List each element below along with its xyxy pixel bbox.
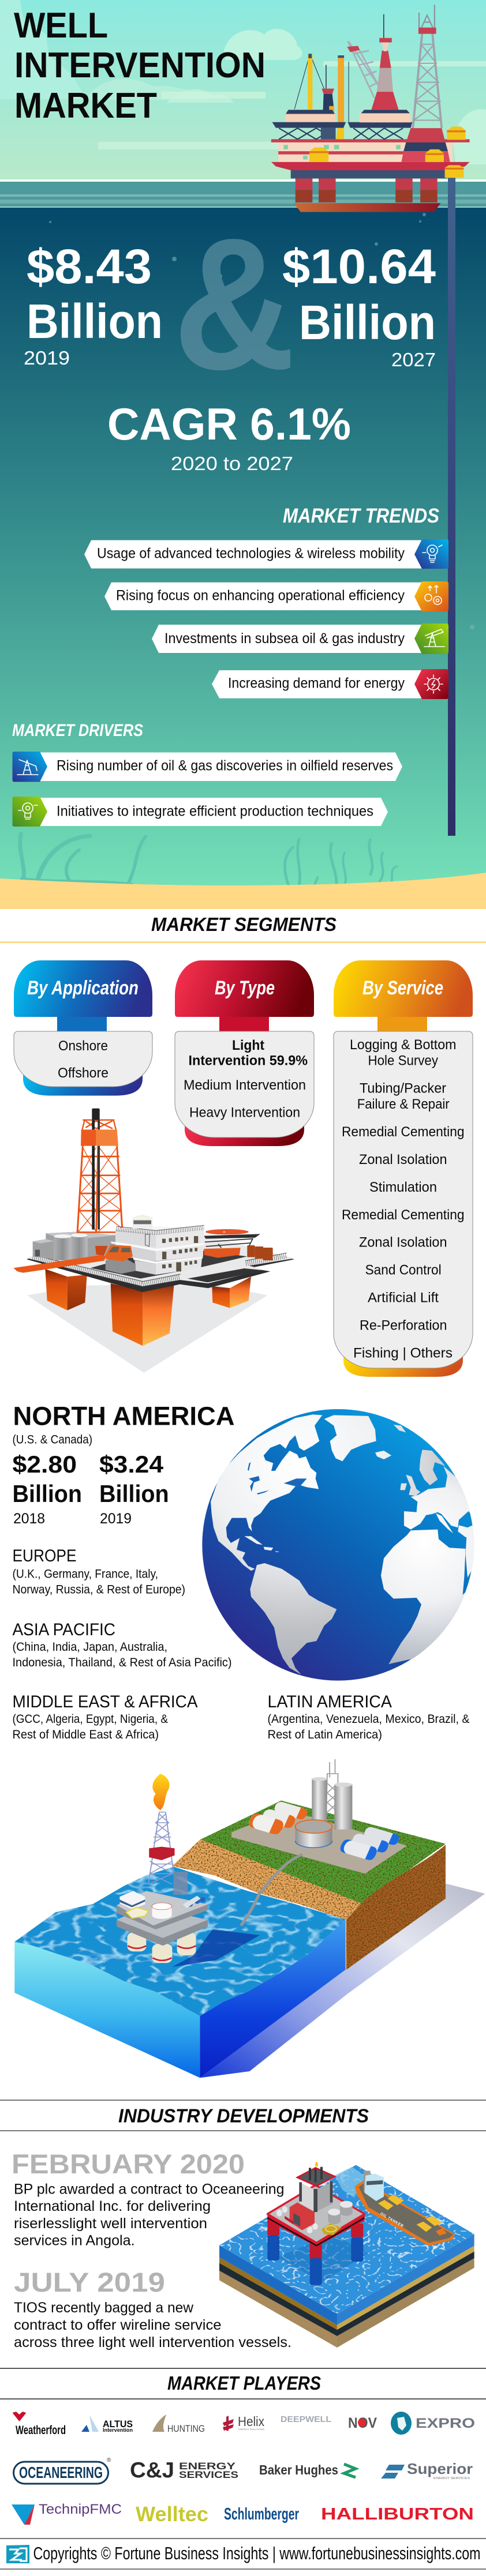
stat: 2027 market value: 2027 [391,349,436,370]
development: February 2020: BP plc awarded a contract to Oceaneering [14,2181,284,2197]
panel: by service: Artificial Lift [368,1290,439,1306]
logo: Altus Intervention: ALTUS [103,2419,133,2429]
region: North America: 2018 [13,1511,45,1527]
region: North America: NORTH AMERICA [13,1402,234,1430]
logo: C&J Energy Services [130,2458,238,2483]
development: February 2020: services in Angola. [14,2233,135,2249]
region: Europe [13,1546,185,1597]
panel: market drivers list [13,752,402,827]
panel: market trends list [84,539,448,699]
panel: by service: Logging & Bottom [350,1037,456,1053]
region: Latin America: LATIN AMERICA [268,1692,392,1711]
trend: subsea investments [152,624,448,654]
title: INTERVENTION [14,46,266,85]
section heading: industry developments: INDUSTRY DEVELOPMENTS [118,2105,369,2126]
driver: discoveries: Rising number of oil & gas discoveries in oilfield reserves [57,758,393,774]
region: Europe: Norway, Russia, & Rest of Europe) [13,1583,185,1597]
development: July 2019 [14,2267,291,2350]
region: Middle East and Africa: MIDDLE EAST & AFRICA [13,1692,197,1711]
logo: Helix: Helix [238,2414,264,2429]
panel: by service: Remedial Cementing [342,1207,464,1223]
stat: 2019 market value [24,239,163,369]
stat: CAGR: 2020 to 2027 [171,453,293,474]
logo: NOV: NOV [348,2415,377,2431]
trend: operational efficiency: Rising focus on enhancing operational efficiency [116,588,405,604]
land, refinery and platform [117,1759,446,1970]
development: February 2020 [12,2149,284,2249]
logo: Superior: Superior [407,2460,473,2477]
panel: ocean hero background [0,0,486,909]
illustration: offshore to onshore isometric scene [14,1759,485,2078]
title: MARKET [14,86,157,126]
panel: by application: By Application [27,977,139,999]
region: Asia Pacific: (China, India, Japan, Australia, [13,1640,167,1654]
region: North America: Billion [13,1480,82,1507]
logo: Welltec: Welltec [136,2502,208,2526]
region: Europe: (U.K., Germany, France, Italy, [13,1568,158,1581]
illustration: offshore platform [13,1109,294,1373]
logo: TechnipFMC: TechnipFMC [39,2502,122,2517]
illustration: offshore platform: H [223,1231,226,1234]
panel: by service: Zonal Isolation [359,1152,447,1167]
region: Middle East and Africa: (GCC, Algeria, Egypt, Nigeria, & [13,1713,168,1726]
heading: market drivers: MARKET DRIVERS [12,721,143,740]
logo: Hunting [152,2414,205,2434]
panel: by application: Offshore [58,1065,109,1081]
panel: company logos [12,2412,475,2526]
panel: by type [175,960,314,1146]
panel: by service: Stimulation [369,1180,437,1195]
region: Europe: EUROPE [13,1546,76,1565]
panel: regional breakdown [13,1402,470,1741]
illustration: isometric rig and tanker: OIL TANKER [379,2212,404,2228]
region: Latin America: Rest of Latin America) [268,1728,382,1741]
development: July 2019: TIOS recently bagged a new [14,2300,194,2316]
panel: by service: Zonal Isolation [359,1235,447,1251]
panel: by type: Intervention 59.9% [188,1053,308,1068]
region: North America [13,1402,234,1527]
logo: TechnipFMC [12,2502,122,2525]
icon: Fortune Business Insights logo [6,2545,29,2563]
section heading: market players: MARKET PLAYERS [167,2372,321,2394]
pipe [448,167,455,836]
stat: 2027 market value: Billion [299,295,436,350]
trend: advanced technologies [84,539,448,569]
title [14,6,266,126]
development: February 2020: riserlesslight well intervention [14,2215,207,2232]
trend: operational efficiency [104,581,448,611]
logo: C&J Energy Services: C&J [130,2458,174,2483]
illustration: seaweed [20,833,397,885]
logo: Baker Hughes: Baker Hughes [259,2462,338,2477]
panel: by service: Hole Survey [368,1053,438,1068]
panel: by service: Failure & Repair [357,1097,450,1112]
logo: Helix: ENERGY SOLUTIONS [238,2428,264,2431]
sand seabed [0,873,486,909]
logo: Altus Intervention [81,2415,133,2433]
development: July 2019: across three light well intervention vessels. [14,2334,291,2350]
panel: by application: Onshore [58,1038,108,1054]
development: February 2020: International Inc. for delivering [14,2198,211,2214]
region: North America: 2019 [100,1511,132,1527]
panel: by service: Sand Control [365,1263,442,1278]
logo: Expro [391,2412,475,2435]
region: Latin America [268,1692,470,1741]
driver: efficient production [13,797,388,827]
logo: Deepwell: DEEPWELL [281,2414,331,2424]
logo: Weatherford: Weatherford [16,2424,66,2437]
driver: discoveries [13,752,402,782]
stat: 2027 market value: $10.64 [282,239,436,294]
footer [0,2538,486,2570]
illustration: isometric rig and tanker [219,2161,474,2348]
trend: energy demand [212,669,448,699]
heading: market trends: MARKET TRENDS [283,505,439,527]
panel: by service: Remedial Cementing [342,1124,464,1140]
region: North America: $2.80 [13,1451,77,1478]
logo: C&J Energy Services: SERVICES [179,2469,238,2480]
panel: by application [14,960,152,1096]
trend: energy demand: Increasing demand for energy [228,675,405,692]
region: Middle East and Africa [13,1692,197,1741]
stat: 2027 market value [282,239,436,370]
panel: by type: Heavy Intervention [189,1105,300,1121]
panel: by service [334,960,473,1377]
title: WELL [14,6,108,46]
region: North America: (U.S. & Canada) [13,1433,92,1447]
logo: Oceaneering: OCEANEERING [19,2464,103,2481]
panel: by service: Re-Perforation [360,1318,447,1334]
region: Latin America: (Argentina, Venezuela, Mexico, Brazil, & [268,1713,470,1726]
panel: by service: By Service [362,977,443,999]
region: Asia Pacific: ASIA PACIFIC [13,1620,115,1639]
icon: oil rig illustration [271,5,470,212]
development: July 2019: JULY 2019 [14,2267,165,2297]
logo: Superior: ENERGY SERVICES [433,2477,470,2480]
panel: by service: Tubing/Packer [360,1080,446,1096]
logo: Hunting: HUNTING [167,2423,205,2434]
logo: Expro: EXPRO [416,2416,475,2431]
icon: ampersand: & [173,199,296,408]
stat: 2019 market value: $8.43 [27,239,152,294]
stat: 2019 market value: 2019 [24,347,70,369]
region: Middle East and Africa: Rest of Middle East & Africa) [13,1728,159,1741]
panel: by type: Light [232,1038,264,1053]
panel: by type: By Type [215,977,275,999]
logo: Halliburton: HALLIBURTON [321,2505,474,2524]
logo: Oceaneering: ® [107,2457,111,2464]
stat: CAGR: CAGR 6.1% [107,399,351,449]
trend: advanced technologies: Usage of advanced technologies & wireless mobility [97,546,405,562]
stat: CAGR [107,399,351,474]
illustration: globe [202,1409,476,1681]
region: North America: Billion [99,1480,169,1507]
logo: C&J Energy Services: ENERGY [179,2461,236,2472]
region: North America: $3.24 [99,1451,164,1478]
stat: 2019 market value: Billion [27,294,163,348]
region: Asia Pacific: Indonesia, Thailand, & Rest of Asia Pacific) [13,1656,232,1669]
region: Asia Pacific [13,1620,232,1669]
development: February 2020: FEBRUARY 2020 [12,2149,245,2179]
panel: by service: Fishing | Others [353,1346,453,1361]
logo: Helix [223,2414,264,2431]
development: July 2019: contract to offer wireline service [14,2317,222,2333]
panel: by type: Medium Intervention [184,1077,306,1093]
trend: subsea investments: Investments in subsea oil & gas industry [165,630,405,647]
logo: Weatherford [13,2412,66,2437]
logo: Altus Intervention: Intervention [103,2427,133,2433]
driver: efficient production: Initiatives to integrate efficient production techniques [57,803,373,819]
logo: Oceaneering [14,2457,111,2484]
section heading: market segments [0,914,486,943]
sea block [14,1867,485,2078]
logo: Schlumberger: Schlumberger [224,2505,299,2524]
logo: Superior [381,2460,473,2480]
section heading: market segments: MARKET SEGMENTS [151,914,337,935]
